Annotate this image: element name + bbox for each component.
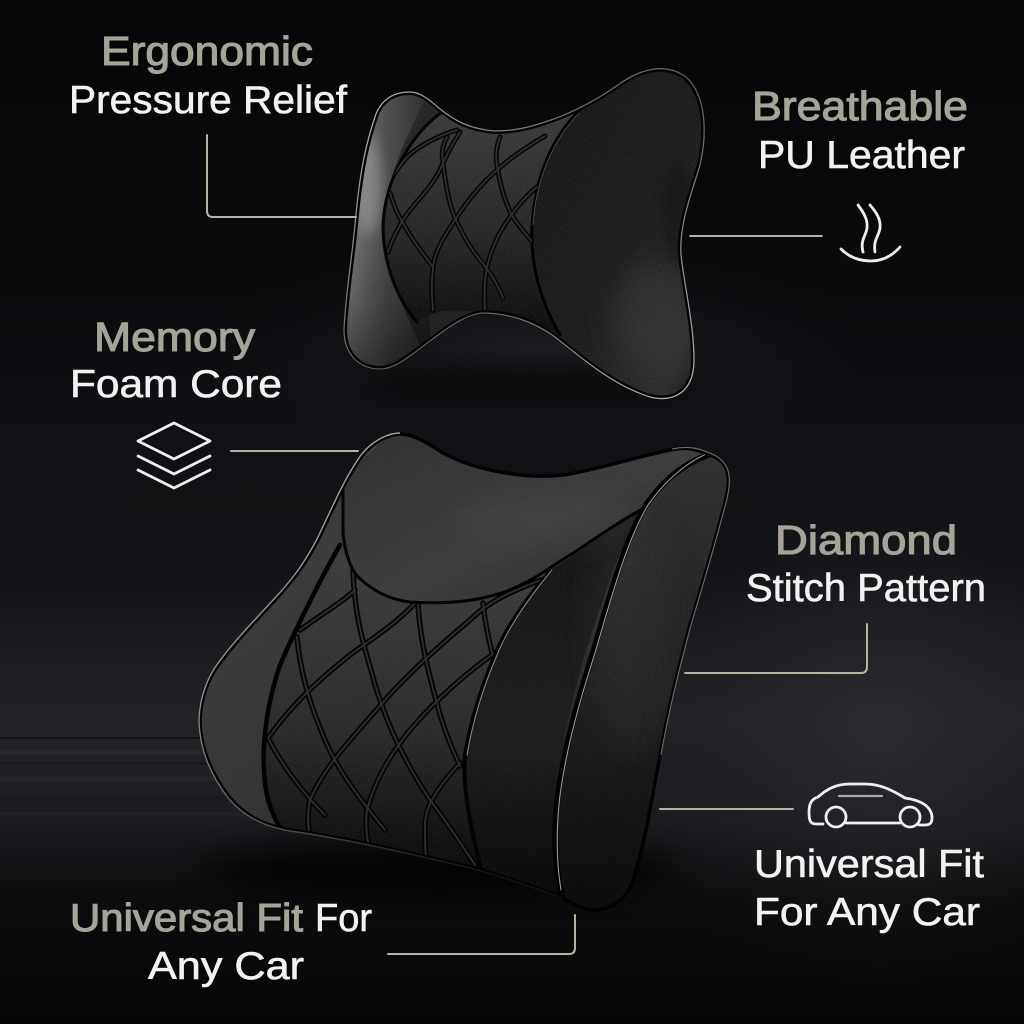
lumbar diamond stitching [268,570,541,865]
icon: foam layers [138,423,210,488]
lumbar diamond panel [266,572,546,868]
label: breathable pu leather: PU Leather [758,134,965,177]
label: memory foam core: Foam Core [70,363,282,406]
connector: ergonomic [207,135,356,217]
label: universal fit bottom: Universal Fit [70,897,303,940]
lumbar shoulder panel [346,436,702,550]
lumbar middle panel [466,513,638,894]
neck pillow [340,60,710,405]
connector: universal fit bottom [388,915,575,954]
connector: diamond stitch [685,624,867,673]
neck pillow right lobe [592,146,700,396]
label: universal fit right [754,843,984,934]
label: diamond stitch pattern: Diamond [775,517,957,563]
label: memory foam core: Memory [94,314,256,360]
neck pillow left lobe [347,95,424,366]
label: universal fit bottom: For [315,897,372,940]
icon: car [809,784,932,827]
label: ergonomic pressure relief: Ergonomic [101,28,313,74]
lumbar seams [343,490,646,603]
label: diamond stitch pattern: Stitch Pattern [746,567,986,610]
neck pillow quilted centre [383,112,578,335]
lumbar right band [558,652,648,908]
neck diamond stitching [388,130,545,310]
label: breathable pu leather [752,83,968,177]
label: ergonomic pressure relief [69,28,347,122]
connector: breathable [690,235,822,237]
lumbar pillow piping [199,433,729,910]
label: universal fit bottom [70,897,372,988]
label: universal fit right: Universal Fit [754,843,984,886]
label: universal fit right: For Any Car [754,891,980,934]
neck seams [383,112,442,322]
lumbar left lobe [202,440,622,825]
label: diamond stitch pattern [746,517,986,610]
label: ergonomic pressure relief: Pressure Relief [69,79,347,122]
connector: memory foam [231,450,358,452]
label: memory foam core [70,314,282,406]
neck pillow piping [345,70,703,398]
label: universal fit bottom: Any Car [148,945,304,988]
lumbar pillow [195,425,740,915]
icon: breathable steam [841,205,900,261]
label: breathable pu leather: Breathable [752,83,968,129]
connector: universal fit right [660,808,793,810]
